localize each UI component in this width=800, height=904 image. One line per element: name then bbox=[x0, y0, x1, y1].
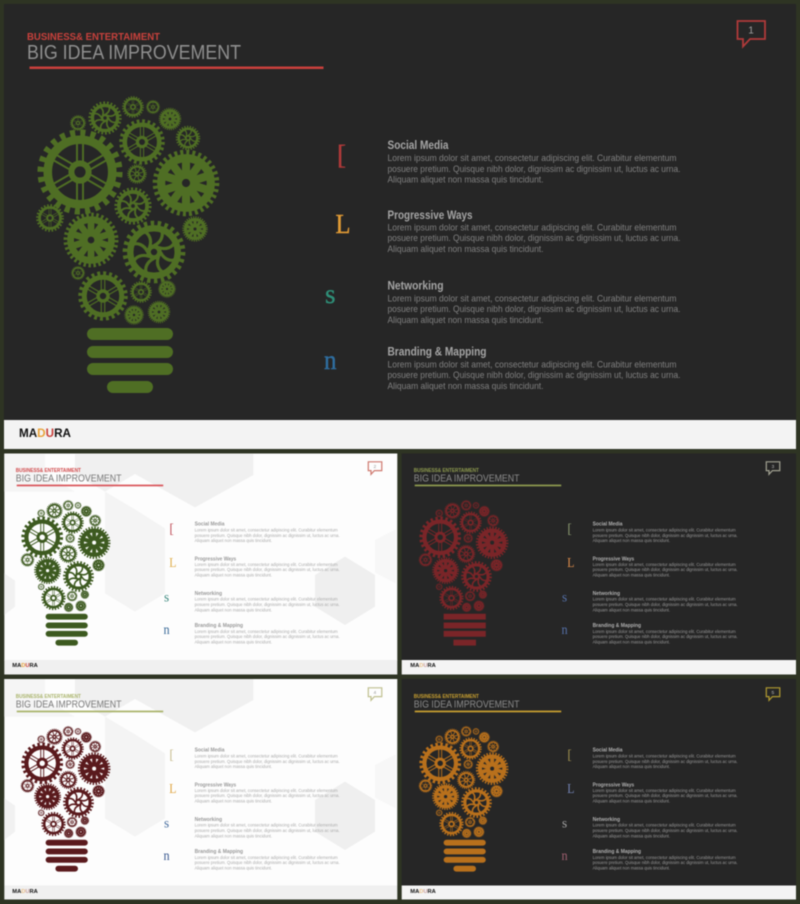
item: Branding & Mapping: posuere pretium. Quisque nibh dolor, dignissim ac dignissim ut, luctus ac urna. bbox=[593, 634, 738, 639]
logo: MADURA bbox=[12, 889, 38, 895]
item: Progressive Ways: Progressive Ways bbox=[195, 556, 237, 562]
item: Networking: Networking bbox=[593, 817, 620, 823]
item: Social Media: [ bbox=[169, 747, 174, 762]
item: Social Media: Lorem ipsum dolor sit amet, consectetur adipiscing elit. Curabitur elementum bbox=[195, 527, 338, 532]
item: Networking: posuere pretium. Quisque nibh dolor, dignissim ac dignissim ut, luctus ac urna. bbox=[195, 828, 340, 833]
logo: MADURA bbox=[12, 663, 38, 669]
title underline bbox=[17, 711, 163, 712]
item: Social Media: Lorem ipsum dolor sit amet, consectetur adipiscing elit. Curabitur elementum bbox=[195, 753, 338, 758]
subtitle: BUSINESS& ENTERTAIMENT bbox=[414, 694, 480, 700]
slide 5: dark slide with orange bulb bbox=[402, 679, 796, 900]
slide 2: white slide with green bulb bbox=[4, 454, 397, 674]
item: Progressive Ways: posuere pretium. Quisque nibh dolor, dignissim ac dignissim ut, luctus ac urna. bbox=[195, 567, 340, 572]
item: Social Media: Social Media bbox=[593, 748, 623, 754]
slide 3: dark slide with red bulb bbox=[402, 454, 796, 674]
item: Social Media: Aliquam aliquet non massa quis tincidunt. bbox=[195, 764, 272, 769]
icon: gear light bulb bbox=[419, 727, 507, 872]
item: Branding & Mapping: Aliquam aliquet non massa quis tincidunt. bbox=[388, 381, 544, 392]
title underline bbox=[415, 711, 561, 712]
item: Progressive Ways: Lorem ipsum dolor sit amet, consectetur adipiscing elit. Curabitur elementum bbox=[593, 562, 736, 567]
item: Networking bbox=[164, 815, 340, 838]
icon: speech bubble with number: 1 bbox=[748, 26, 754, 36]
item: Progressive Ways: posuere pretium. Quisque nibh dolor, dignissim ac dignissim ut, luctus ac urna. bbox=[593, 793, 738, 798]
slide 4: white slide with maroon bulb bbox=[4, 679, 397, 900]
title underline bbox=[415, 485, 561, 486]
item: Branding & Mapping: Lorem ipsum dolor sit amet, consectetur adipiscing elit. Curabitur elementum bbox=[195, 629, 338, 634]
item: Networking: Lorem ipsum dolor sit amet, consectetur adipiscing elit. Curabitur elementum bbox=[195, 597, 338, 602]
item: Social Media: [ bbox=[567, 521, 572, 536]
item: Social Media bbox=[169, 521, 340, 543]
item: Branding & Mapping: Branding & Mapping bbox=[388, 344, 486, 358]
logo: MADURA bbox=[19, 428, 71, 440]
hexagon background pattern bbox=[4, 454, 396, 625]
item: Branding & Mapping bbox=[163, 622, 340, 645]
item: Branding & Mapping bbox=[561, 622, 738, 645]
item: Progressive Ways: L bbox=[169, 555, 176, 570]
item: Branding & Mapping: Branding & Mapping bbox=[593, 849, 641, 855]
title: BIG IDEA IMPROVEMENT bbox=[16, 699, 122, 710]
panel: white slide background bbox=[4, 454, 397, 660]
icon: speech bubble with number bbox=[738, 21, 765, 46]
item: Branding & Mapping: n bbox=[163, 622, 170, 637]
item: Networking: Networking bbox=[195, 817, 222, 823]
item: Branding & Mapping: Lorem ipsum dolor sit amet, consectetur adipiscing elit. Curabitur elementum bbox=[593, 629, 736, 634]
item: Social Media: Social Media bbox=[593, 522, 623, 528]
item: Branding & Mapping: Aliquam aliquet non massa quis tincidunt. bbox=[593, 640, 670, 645]
item: Progressive Ways: Aliquam aliquet non massa quis tincidunt. bbox=[195, 798, 272, 803]
item: Branding & Mapping: Lorem ipsum dolor sit amet, consectetur adipiscing elit. Curabitur elementum bbox=[593, 855, 736, 860]
item: Progressive Ways: Lorem ipsum dolor sit amet, consectetur adipiscing elit. Curabitur elementum bbox=[388, 222, 677, 234]
icon: speech bubble with number bbox=[368, 462, 382, 474]
icon: gear light bulb bbox=[37, 97, 217, 393]
item: Branding & Mapping: Aliquam aliquet non massa quis tincidunt. bbox=[195, 640, 272, 645]
item: Progressive Ways: posuere pretium. Quisque nibh dolor, dignissim ac dignissim ut, luctus ac urna. bbox=[388, 233, 680, 244]
item: Branding & Mapping bbox=[163, 848, 340, 871]
slide content bbox=[12, 462, 382, 669]
icon: gear light bulb bbox=[419, 501, 507, 646]
item: Networking: s bbox=[325, 279, 336, 309]
item: Social Media: Social Media bbox=[195, 748, 225, 754]
item: Social Media: Lorem ipsum dolor sit amet, consectetur adipiscing elit. Curabitur elementum bbox=[388, 153, 677, 164]
item: Progressive Ways bbox=[169, 781, 340, 803]
item: Networking: Networking bbox=[195, 591, 222, 597]
item: Social Media bbox=[567, 521, 738, 543]
item: Progressive Ways: Aliquam aliquet non massa quis tincidunt. bbox=[593, 572, 670, 577]
item: Progressive Ways: Aliquam aliquet non massa quis tincidunt. bbox=[388, 244, 544, 255]
item: Progressive Ways: Lorem ipsum dolor sit amet, consectetur adipiscing elit. Curabitur elementum bbox=[195, 788, 338, 793]
item: Branding & Mapping: posuere pretium. Quisque nibh dolor, dignissim ac dignissim ut, luctus ac urna. bbox=[195, 860, 340, 865]
icon: speech bubble with number: 4 bbox=[374, 690, 377, 696]
footer bar bbox=[4, 420, 796, 449]
subtitle: BUSINESS& ENTERTAIMENT bbox=[16, 694, 82, 700]
icon: speech bubble with number: 3 bbox=[772, 464, 775, 470]
item: Social Media bbox=[169, 747, 340, 769]
item: Branding & Mapping: Lorem ipsum dolor sit amet, consectetur adipiscing elit. Curabitur elementum bbox=[388, 360, 677, 370]
title: BIG IDEA IMPROVEMENT bbox=[414, 699, 520, 710]
item: Social Media: Aliquam aliquet non massa quis tincidunt. bbox=[593, 538, 670, 543]
item: Networking bbox=[562, 815, 738, 838]
item: Social Media: Aliquam aliquet non massa quis tincidunt. bbox=[195, 538, 272, 543]
item: Branding & Mapping: posuere pretium. Quisque nibh dolor, dignissim ac dignissim ut, luctus ac urna. bbox=[388, 370, 680, 381]
item: Branding & Mapping: n bbox=[324, 345, 337, 375]
item: Social Media bbox=[567, 747, 738, 769]
item: Branding & Mapping: Branding & Mapping bbox=[195, 849, 243, 855]
item: Networking: Aliquam aliquet non massa quis tincidunt. bbox=[388, 315, 544, 326]
item: Social Media: posuere pretium. Quisque nibh dolor, dignissim ac dignissim ut, luctus ac urna. bbox=[195, 759, 340, 764]
item: Progressive Ways bbox=[336, 208, 680, 255]
item: Networking: Aliquam aliquet non massa quis tincidunt. bbox=[593, 607, 670, 612]
item: Social Media: Aliquam aliquet non massa quis tincidunt. bbox=[388, 174, 544, 186]
item: Social Media: [ bbox=[567, 747, 572, 762]
item: Social Media: posuere pretium. Quisque nibh dolor, dignissim ac dignissim ut, luctus ac urna. bbox=[195, 533, 340, 538]
subtitle: BUSINESS& ENTERTAIMENT bbox=[27, 31, 161, 43]
item: Branding & Mapping: Branding & Mapping bbox=[593, 623, 641, 629]
item: Progressive Ways: Progressive Ways bbox=[593, 556, 635, 562]
item: Networking: posuere pretium. Quisque nibh dolor, dignissim ac dignissim ut, luctus ac urna. bbox=[593, 602, 738, 607]
item: Networking bbox=[325, 278, 680, 326]
panel: dark slide background bbox=[4, 4, 796, 420]
item: Networking: s bbox=[164, 815, 169, 830]
footer bar bbox=[4, 886, 397, 900]
item: Social Media: Social Media bbox=[195, 522, 225, 528]
item: Progressive Ways: L bbox=[169, 781, 176, 796]
item: Social Media: posuere pretium. Quisque nibh dolor, dignissim ac dignissim ut, luctus ac urna. bbox=[593, 759, 738, 764]
item: Progressive Ways: Lorem ipsum dolor sit amet, consectetur adipiscing elit. Curabitur elementum bbox=[593, 788, 736, 793]
item: Branding & Mapping: Aliquam aliquet non massa quis tincidunt. bbox=[593, 866, 670, 871]
item: Progressive Ways bbox=[169, 555, 340, 577]
item: Progressive Ways: L bbox=[567, 555, 574, 570]
item: Networking: Lorem ipsum dolor sit amet, consectetur adipiscing elit. Curabitur elementum bbox=[593, 823, 736, 828]
hexagon background pattern bbox=[4, 679, 396, 850]
item: Networking: Networking bbox=[593, 591, 620, 597]
slide 1: large dark slide bbox=[4, 4, 796, 449]
item: Branding & Mapping: Lorem ipsum dolor sit amet, consectetur adipiscing elit. Curabitur elementum bbox=[195, 855, 338, 860]
item: Social Media: [ bbox=[169, 521, 174, 536]
logo: MADURA bbox=[410, 663, 436, 669]
icon: speech bubble with number: 2 bbox=[374, 464, 377, 470]
item: Branding & Mapping: Branding & Mapping bbox=[195, 623, 243, 629]
slide content bbox=[12, 688, 382, 895]
item: Progressive Ways: Progressive Ways bbox=[593, 782, 635, 788]
subtitle: BUSINESS& ENTERTAIMENT bbox=[414, 468, 480, 474]
item: Progressive Ways bbox=[567, 555, 738, 577]
item: Progressive Ways: Lorem ipsum dolor sit amet, consectetur adipiscing elit. Curabitur elementum bbox=[195, 562, 338, 567]
panel: dark slide background bbox=[402, 679, 796, 886]
icon: speech bubble with number bbox=[368, 688, 382, 700]
item: Social Media: [ bbox=[337, 140, 346, 170]
icon: speech bubble with number bbox=[766, 462, 780, 474]
subtitle: BUSINESS& ENTERTAIMENT bbox=[16, 468, 82, 474]
item: Networking bbox=[562, 589, 738, 612]
item: Branding & Mapping: n bbox=[561, 848, 568, 863]
item: Progressive Ways bbox=[567, 781, 738, 803]
item: Branding & Mapping bbox=[324, 344, 680, 392]
item: Branding & Mapping: n bbox=[561, 622, 568, 637]
item: Networking: Aliquam aliquet non massa quis tincidunt. bbox=[195, 607, 272, 612]
logo: MADURA bbox=[410, 889, 436, 895]
item: Progressive Ways: posuere pretium. Quisque nibh dolor, dignissim ac dignissim ut, luctus ac urna. bbox=[195, 793, 340, 798]
item: Networking: s bbox=[562, 815, 567, 830]
item: Branding & Mapping: Aliquam aliquet non massa quis tincidunt. bbox=[195, 866, 272, 871]
item: Networking bbox=[164, 589, 340, 612]
item: Networking: Networking bbox=[388, 278, 444, 292]
item: Networking: s bbox=[164, 589, 169, 604]
item: Social Media bbox=[337, 138, 680, 186]
item: Social Media: posuere pretium. Quisque nibh dolor, dignissim ac dignissim ut, luctus ac urna. bbox=[388, 164, 680, 175]
item: Branding & Mapping bbox=[561, 848, 738, 871]
item: Social Media: Aliquam aliquet non massa quis tincidunt. bbox=[593, 764, 670, 769]
icon: gear light bulb bbox=[21, 501, 109, 646]
slide content bbox=[410, 462, 780, 669]
title: BIG IDEA IMPROVEMENT bbox=[27, 42, 241, 64]
item: Networking: Lorem ipsum dolor sit amet, consectetur adipiscing elit. Curabitur elementum bbox=[195, 823, 338, 828]
item: Networking: Lorem ipsum dolor sit amet, consectetur adipiscing elit. Curabitur elementum bbox=[593, 597, 736, 602]
title underline bbox=[30, 66, 324, 69]
icon: speech bubble with number: 5 bbox=[772, 690, 775, 696]
item: Social Media: Social Media bbox=[388, 138, 449, 152]
item: Branding & Mapping: n bbox=[163, 848, 170, 863]
title underline bbox=[17, 485, 163, 486]
item: Branding & Mapping: posuere pretium. Quisque nibh dolor, dignissim ac dignissim ut, luctus ac urna. bbox=[593, 860, 738, 865]
slide content bbox=[410, 688, 780, 895]
item: Networking: posuere pretium. Quisque nibh dolor, dignissim ac dignissim ut, luctus ac urna. bbox=[388, 304, 680, 315]
item: Progressive Ways: Progressive Ways bbox=[388, 208, 473, 222]
item: Social Media: Lorem ipsum dolor sit amet, consectetur adipiscing elit. Curabitur elementum bbox=[593, 753, 736, 758]
item: Networking: s bbox=[562, 589, 567, 604]
title: BIG IDEA IMPROVEMENT bbox=[16, 473, 122, 484]
footer bar bbox=[402, 886, 796, 900]
footer bar bbox=[4, 660, 397, 674]
panel: white slide background bbox=[4, 679, 397, 886]
item: Networking: posuere pretium. Quisque nibh dolor, dignissim ac dignissim ut, luctus ac urna. bbox=[195, 602, 340, 607]
item: Progressive Ways: Aliquam aliquet non massa quis tincidunt. bbox=[195, 572, 272, 577]
panel: dark slide background bbox=[402, 454, 796, 660]
item: Networking: Aliquam aliquet non massa quis tincidunt. bbox=[593, 833, 670, 838]
item: Progressive Ways: Progressive Ways bbox=[195, 782, 237, 788]
item: Social Media: Lorem ipsum dolor sit amet, consectetur adipiscing elit. Curabitur elementum bbox=[593, 527, 736, 532]
icon: speech bubble with number bbox=[766, 688, 780, 700]
item: Networking: posuere pretium. Quisque nibh dolor, dignissim ac dignissim ut, luctus ac urna. bbox=[593, 828, 738, 833]
item: Networking: Lorem ipsum dolor sit amet, consectetur adipiscing elit. Curabitur elementum bbox=[388, 294, 677, 304]
item: Networking: Aliquam aliquet non massa quis tincidunt. bbox=[195, 833, 272, 838]
item: Progressive Ways: posuere pretium. Quisque nibh dolor, dignissim ac dignissim ut, luctus ac urna. bbox=[593, 567, 738, 572]
item: Progressive Ways: Aliquam aliquet non massa quis tincidunt. bbox=[593, 798, 670, 803]
item: Progressive Ways: L bbox=[336, 209, 350, 239]
icon: gear light bulb bbox=[21, 727, 109, 872]
item: Social Media: posuere pretium. Quisque nibh dolor, dignissim ac dignissim ut, luctus ac urna. bbox=[593, 533, 738, 538]
title: BIG IDEA IMPROVEMENT bbox=[414, 473, 520, 484]
footer bar bbox=[402, 660, 796, 674]
item: Branding & Mapping: posuere pretium. Quisque nibh dolor, dignissim ac dignissim ut, luctus ac urna. bbox=[195, 634, 340, 639]
item: Progressive Ways: L bbox=[567, 781, 574, 796]
